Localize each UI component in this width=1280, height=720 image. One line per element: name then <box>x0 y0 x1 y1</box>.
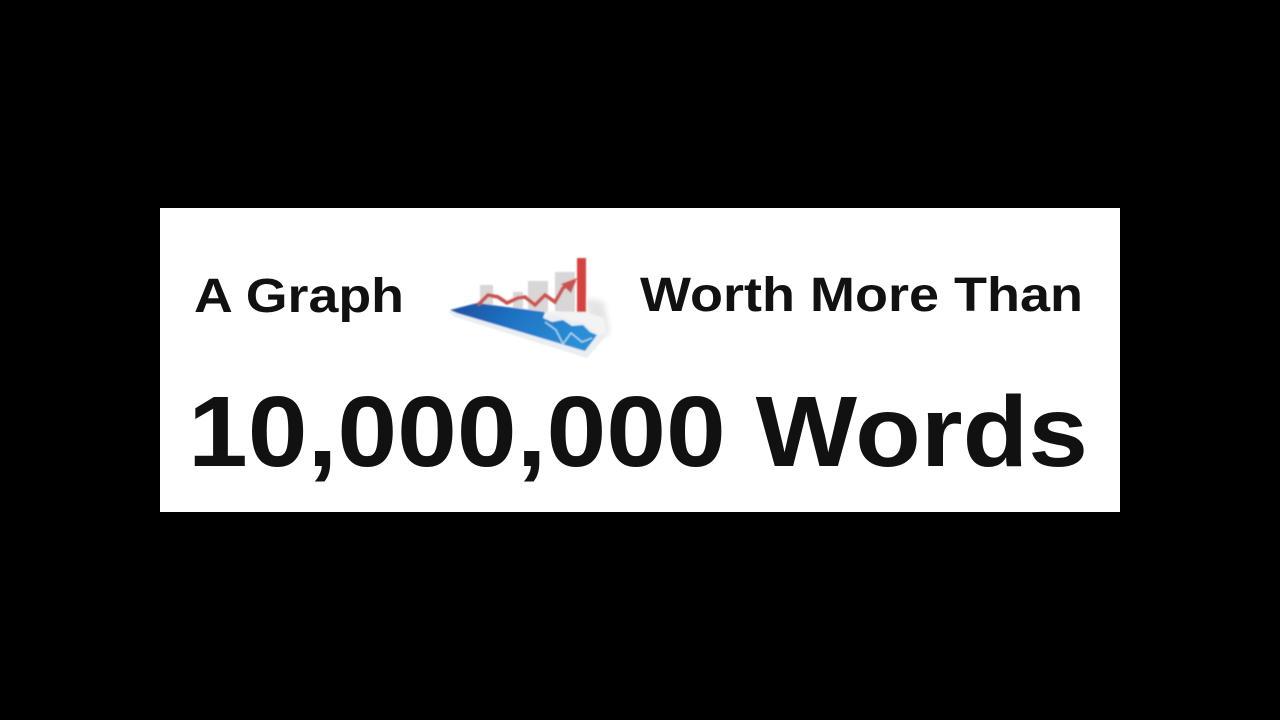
heading: A Graph: A Graph <box>194 270 404 323</box>
heading: Worth More Than: Worth More Than <box>640 269 1083 322</box>
tall red bar <box>577 258 586 312</box>
white sheet <box>448 303 607 358</box>
blue sheet <box>450 303 597 351</box>
headline: 10,000,000 Words: 10,000,000 Words <box>188 376 1088 488</box>
arrow head <box>561 278 577 293</box>
white banner panel <box>160 208 1120 512</box>
red arrow line <box>478 281 575 305</box>
page curl <box>543 311 607 335</box>
grey bars <box>480 272 575 314</box>
sheet line plot <box>545 322 592 344</box>
chart shadow <box>586 298 610 335</box>
icon: 3D chart with rising red arrow <box>448 258 610 358</box>
